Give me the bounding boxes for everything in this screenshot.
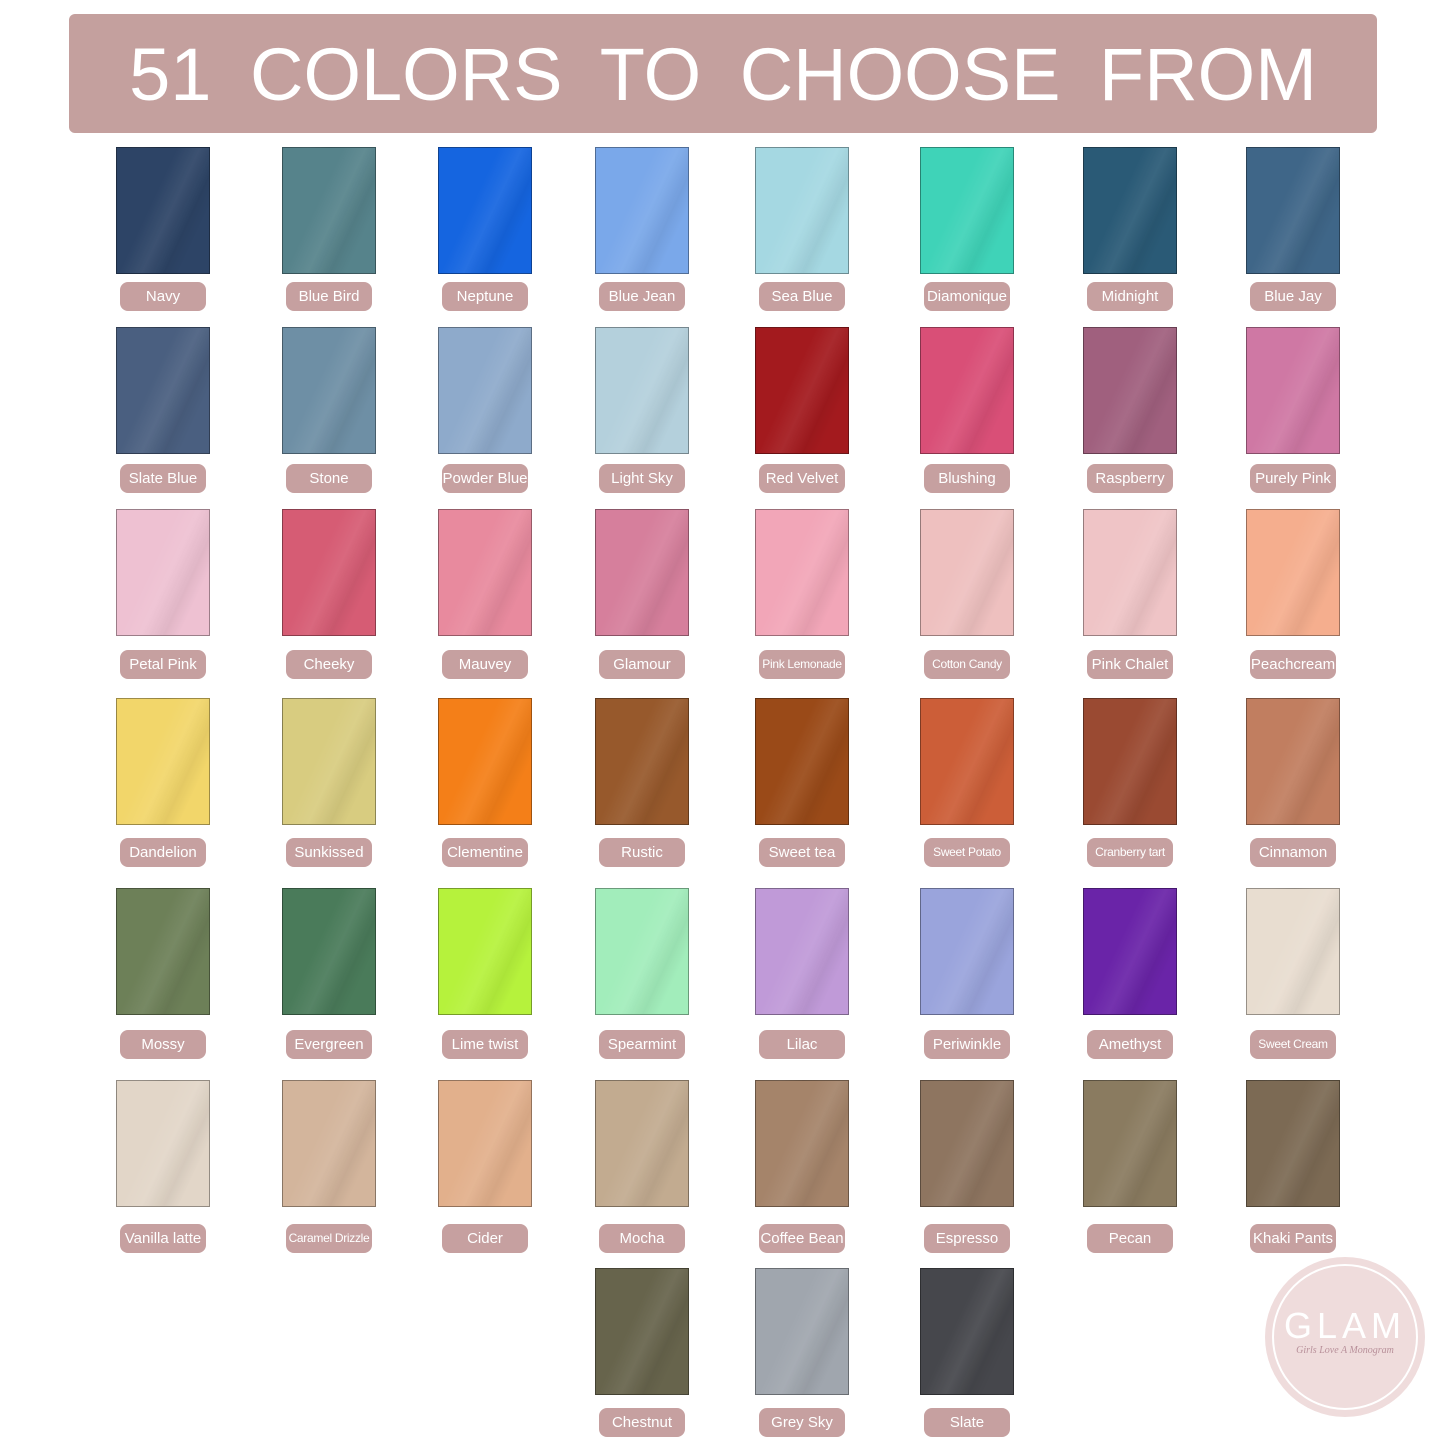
text: Cinnamon	[1259, 844, 1327, 861]
text: Pecan	[1109, 1230, 1151, 1247]
text: Glamour	[613, 656, 671, 673]
text: Cheeky	[304, 656, 354, 673]
logo: GLAM: Girls Love A Monogram	[1296, 1345, 1394, 1356]
text: Khaki Pants	[1253, 1230, 1333, 1247]
row 5	[116, 888, 210, 1059]
text: Sweet Potato	[933, 845, 1001, 859]
text: Lilac	[787, 1036, 817, 1053]
row 3: Petal Pink	[129, 656, 197, 673]
text: Pink Chalet	[1092, 656, 1168, 673]
text: Sweet Cream	[1258, 1037, 1328, 1051]
text: Cider	[467, 1230, 503, 1247]
row 4	[116, 698, 210, 867]
text: Blue Jean	[609, 288, 675, 305]
text: Spearmint	[608, 1036, 676, 1053]
text: Mauvey	[459, 656, 511, 673]
row 6: Vanilla latte	[125, 1230, 201, 1247]
text: Grey Sky	[771, 1414, 833, 1431]
text: Sunkissed	[294, 844, 364, 861]
text: Blushing	[938, 470, 996, 487]
text: Evergreen	[294, 1036, 364, 1053]
text: Amethyst	[1099, 1036, 1161, 1053]
row 3	[116, 509, 210, 679]
text: Diamonique	[927, 288, 1007, 305]
text: Blue Bird	[299, 288, 359, 305]
text: Periwinkle	[933, 1036, 1001, 1053]
row 4: Dandelion	[129, 844, 197, 861]
text: Slate	[950, 1414, 984, 1431]
text: Sweet tea	[769, 844, 835, 861]
text: Red Velvet	[766, 470, 838, 487]
text: Cranberry tart	[1095, 845, 1165, 859]
text: Clementine	[447, 844, 523, 861]
text: Stone	[309, 470, 349, 487]
row 5: Mossy	[141, 1036, 185, 1053]
row 7	[595, 1268, 689, 1437]
row 2: Slate Blue	[129, 470, 197, 487]
text: Light Sky	[611, 470, 673, 487]
text: Rustic	[621, 844, 663, 861]
text: Lime twist	[452, 1036, 518, 1053]
text: Neptune	[457, 288, 513, 305]
text: Raspberry	[1095, 470, 1165, 487]
row 6	[116, 1080, 210, 1253]
text: Purely Pink	[1255, 470, 1331, 487]
text: Peachcream	[1251, 656, 1335, 673]
row 7: Chestnut	[612, 1414, 672, 1431]
text: Sea Blue	[772, 288, 832, 305]
text: Blue Jay	[1264, 288, 1322, 305]
logo: GLAM: GLAM	[1284, 1305, 1406, 1346]
text: Espresso	[936, 1230, 998, 1247]
text: Midnight	[1102, 288, 1158, 305]
row 1	[116, 147, 210, 311]
row 2	[116, 327, 210, 493]
logo: GLAM	[1265, 1257, 1425, 1417]
title banner	[69, 14, 1377, 133]
row 1: Navy	[146, 288, 180, 305]
text: Powder Blue	[442, 470, 528, 487]
text: Mocha	[619, 1230, 665, 1247]
text: Coffee Bean	[760, 1230, 844, 1247]
text: Pink Lemonade	[762, 657, 842, 671]
text: Caramel Drizzle	[289, 1231, 369, 1245]
title banner: 51 COLORS TO CHOOSE FROM	[129, 33, 1317, 116]
text: Cotton Candy	[932, 657, 1002, 671]
